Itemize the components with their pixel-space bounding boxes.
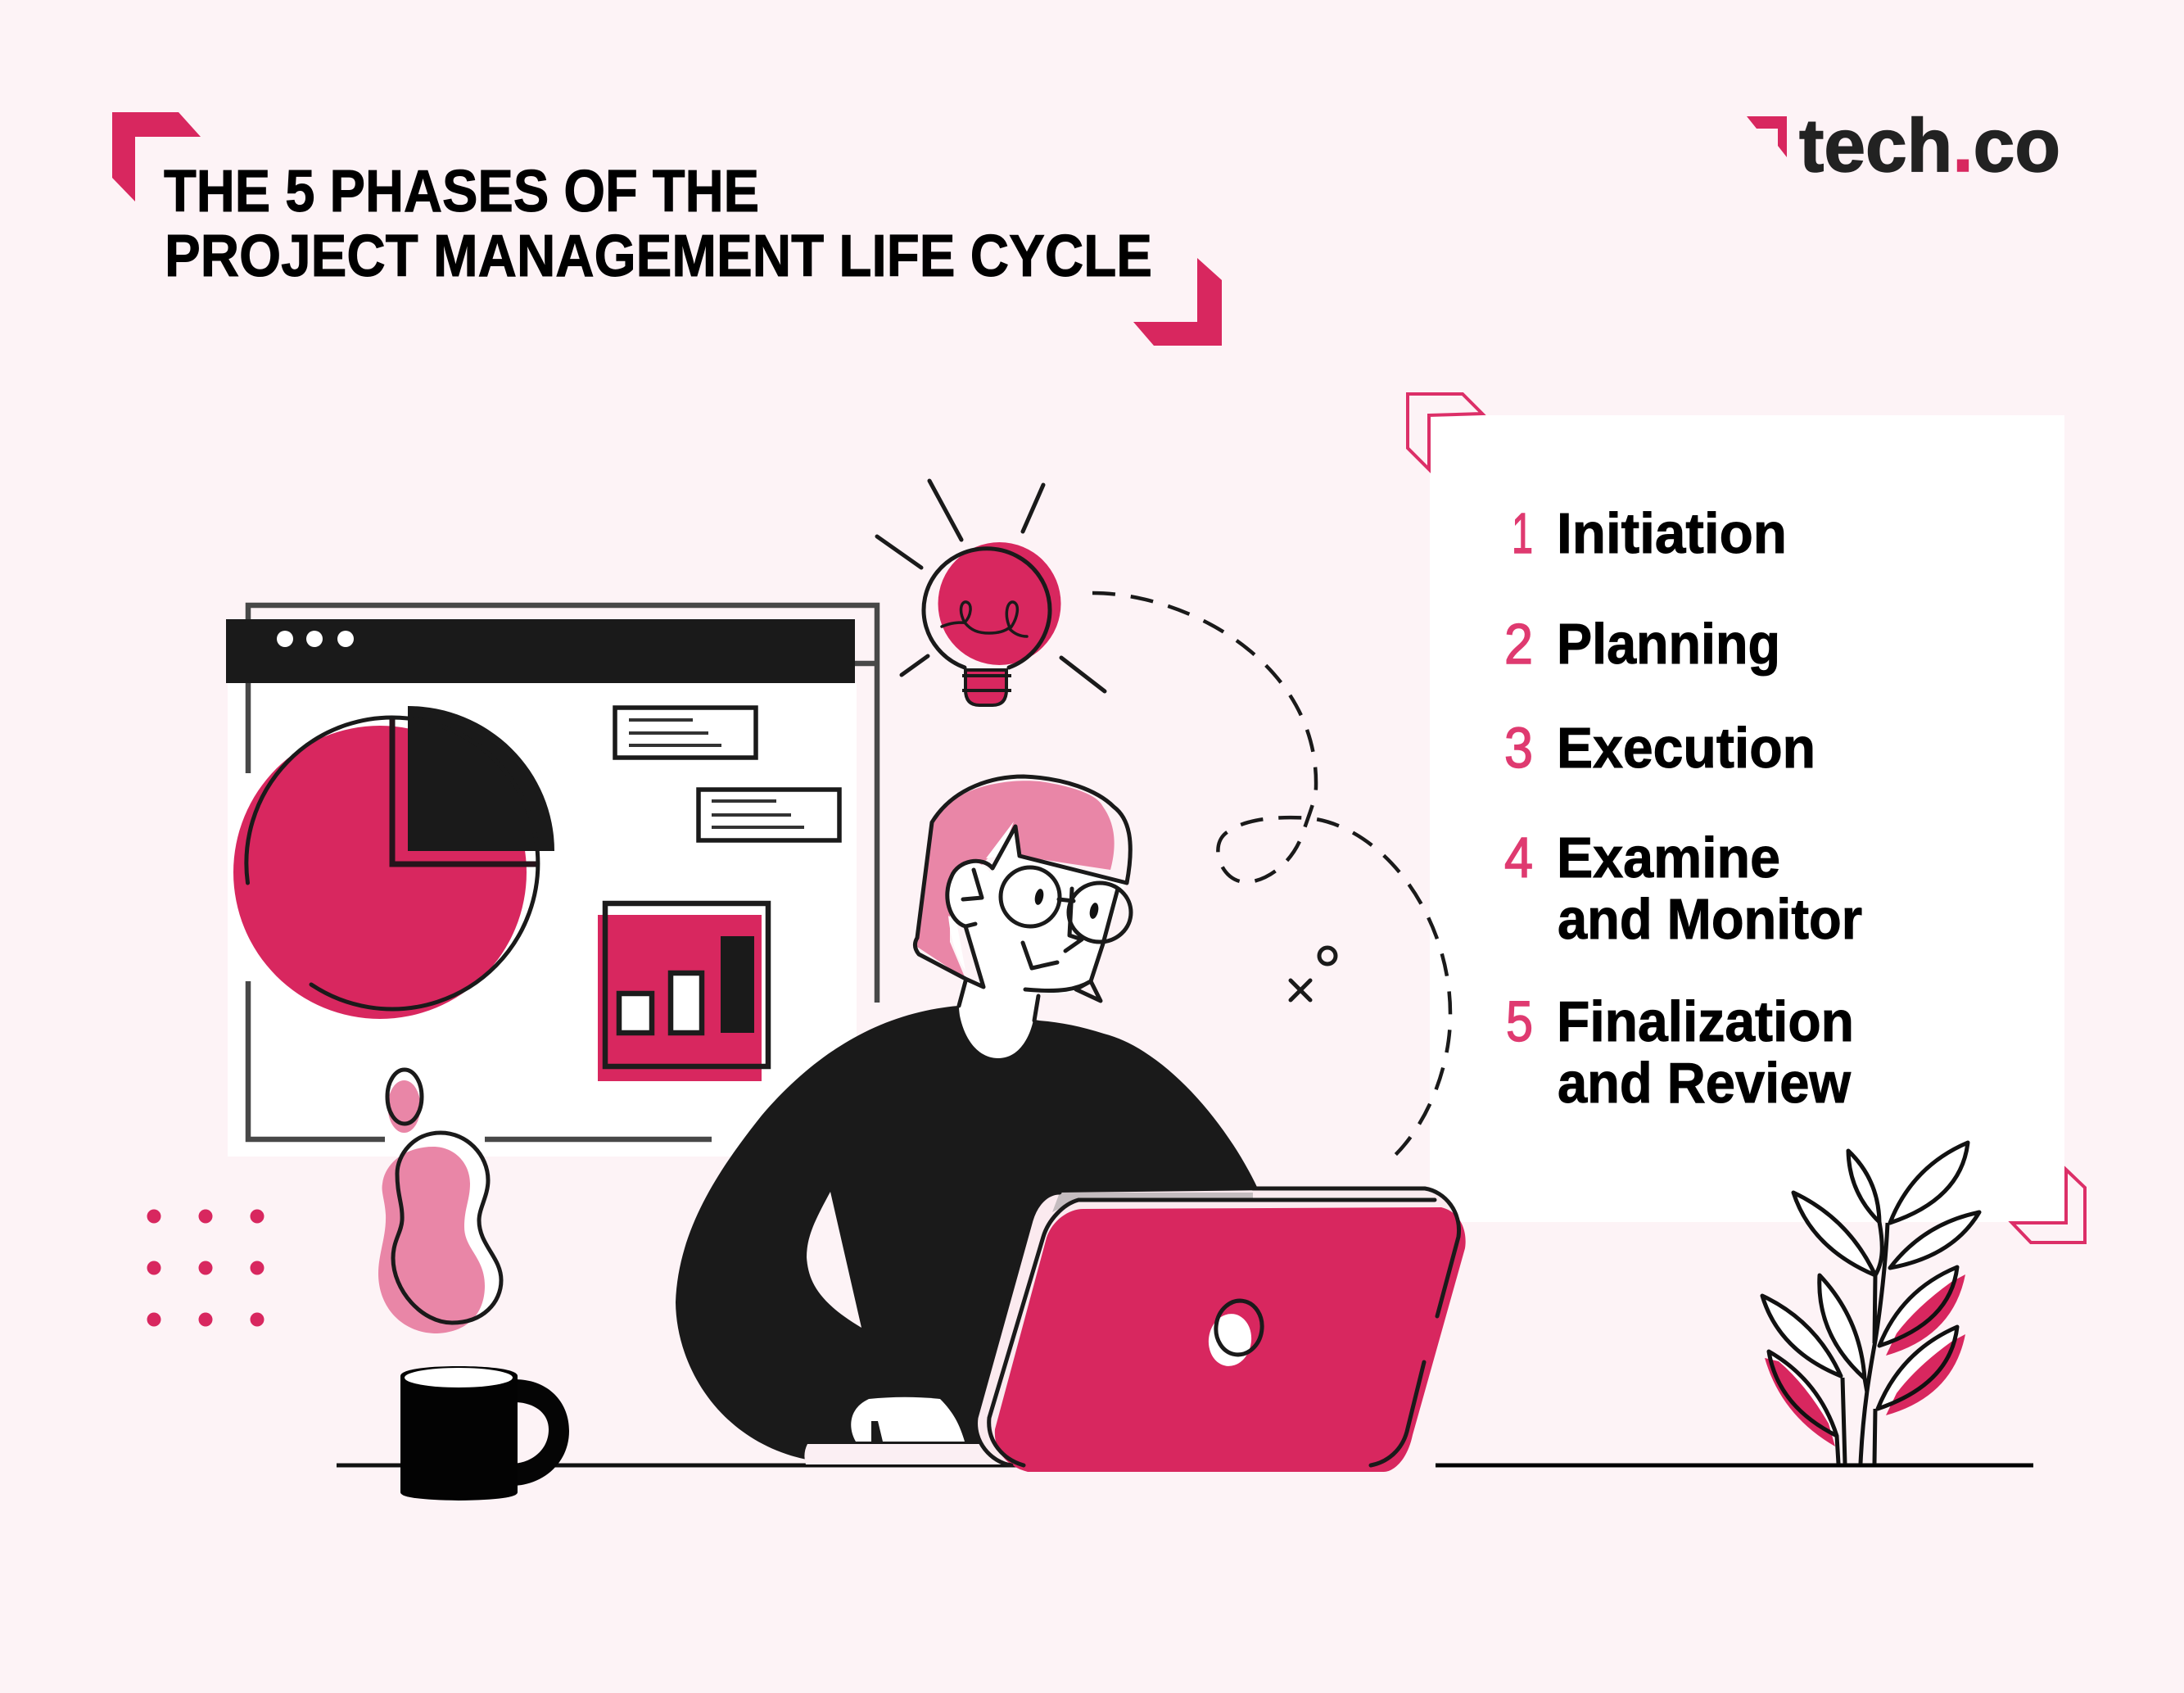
phase 5	[1506, 989, 1854, 1115]
phase 4: Examine	[1557, 826, 1780, 890]
title	[164, 159, 1152, 289]
pupils	[1033, 888, 1100, 920]
coffee mug	[400, 1366, 569, 1501]
stems	[1837, 1222, 1888, 1464]
glasses	[1001, 867, 1131, 942]
leaf fills	[1762, 1143, 1979, 1436]
arm gap	[807, 1192, 861, 1328]
keyboard	[804, 1444, 1003, 1464]
laptop	[976, 1188, 1466, 1472]
title: PROJECT MANAGEMENT LIFE CYCLE	[165, 224, 1152, 289]
phases list	[1504, 501, 1862, 1115]
phase 3: 3	[1504, 716, 1533, 780]
dashed flight path	[1092, 593, 1450, 1157]
table line right	[1436, 1463, 2033, 1468]
phase 2: Planning	[1557, 612, 1780, 676]
body	[676, 1006, 1261, 1466]
phase 1: 1	[1512, 501, 1533, 565]
hair	[915, 781, 1115, 979]
person	[676, 776, 1261, 1466]
hand	[851, 1397, 965, 1442]
phase 1: Initiation	[1557, 501, 1787, 565]
phase 5: Finalization	[1557, 989, 1854, 1053]
pink leaf shadows	[1765, 1274, 1965, 1446]
panel corner: bottom right outline	[2012, 1170, 2085, 1243]
pie chart	[233, 706, 554, 1019]
title corner bracket: bottom right	[1133, 258, 1222, 346]
title corner bracket: top left	[112, 112, 201, 201]
decorative dot grid	[147, 1209, 264, 1327]
steam: small oval	[387, 1070, 422, 1133]
text card 2	[699, 790, 839, 840]
marks: x and o	[1291, 948, 1336, 1000]
panel corner: top left outline	[1408, 394, 1482, 469]
table line left	[337, 1463, 1392, 1468]
phase 4: 4	[1504, 826, 1533, 890]
leaf outlines	[1762, 1143, 1979, 1436]
neck	[959, 979, 1038, 1058]
hair and face outline	[915, 776, 1130, 991]
collar	[1076, 981, 1101, 1001]
panel: phases list background	[1430, 415, 2064, 1222]
phase 4: and Monitor	[1558, 887, 1862, 951]
text card 1	[615, 708, 756, 758]
plant	[1762, 1143, 1979, 1464]
logo: tech.co: tech.co	[1799, 104, 2060, 188]
phase 5: and Review	[1558, 1051, 1852, 1115]
face	[947, 826, 1126, 994]
steam: peanut blob	[378, 1133, 501, 1333]
phase 5: 5	[1506, 989, 1533, 1053]
phase 2: 2	[1504, 612, 1533, 676]
phase 4	[1504, 826, 1862, 951]
browser window	[226, 605, 877, 1157]
nose and mouth	[1023, 889, 1082, 968]
hair highlights	[948, 822, 1014, 971]
light bulb	[877, 481, 1105, 705]
bar chart	[598, 903, 768, 1081]
title: THE 5 PHASES OF THE	[164, 159, 759, 224]
phase 3: Execution	[1557, 716, 1815, 780]
